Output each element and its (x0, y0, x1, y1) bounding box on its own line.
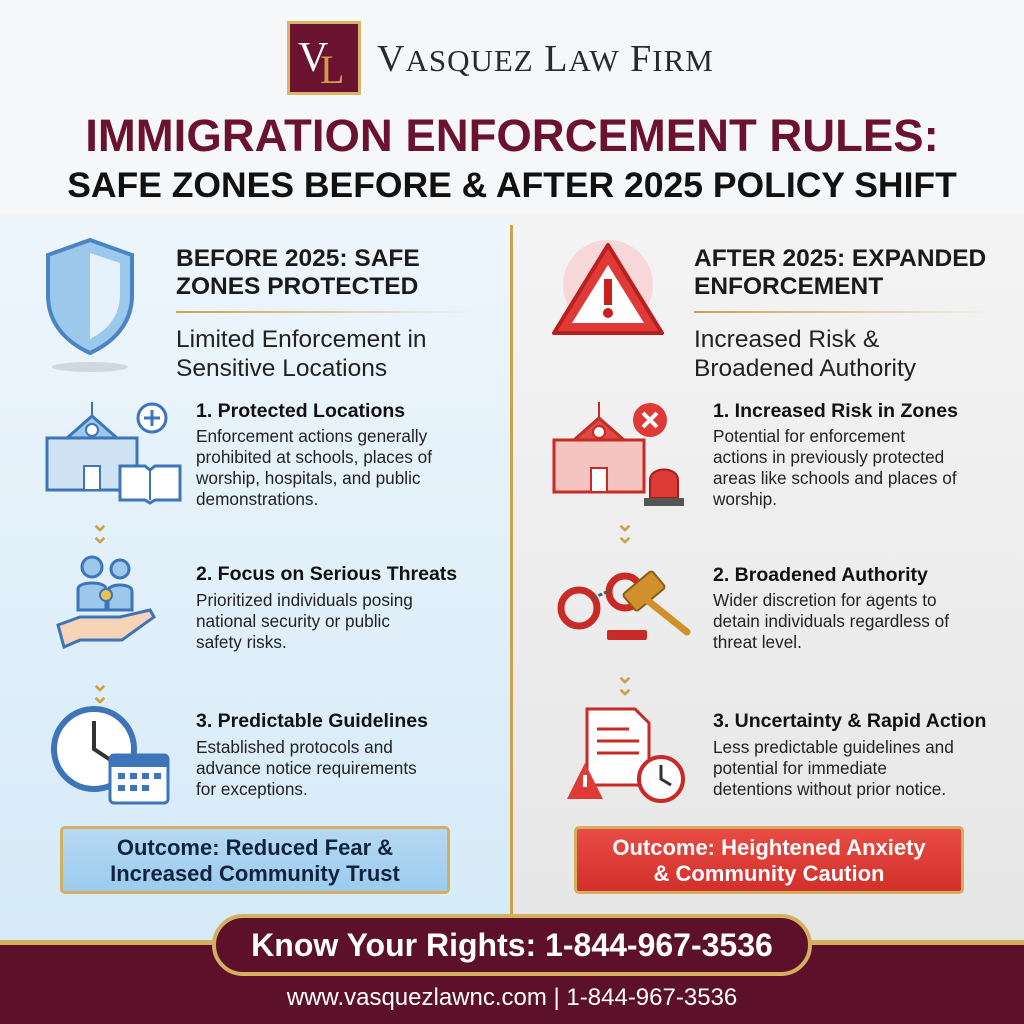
left item 3: for exceptions. (196, 779, 308, 799)
left item 2: Prioritized individuals posing (196, 590, 413, 610)
chevron left 1: ⌄ (91, 511, 109, 536)
chevron left 2: ⌄ (91, 671, 109, 696)
chevron right 2: ⌄ (616, 663, 634, 688)
right item 1: 1. Increased Risk in Zones (713, 400, 958, 422)
left item 1: prohibited at schools, places of (196, 447, 432, 467)
left item 1 (46, 400, 432, 509)
icon: school with alert (552, 402, 684, 506)
left item 3: advance notice requirements (196, 758, 417, 778)
title: IMMIGRATION ENFORCEMENT RULES: (85, 110, 939, 161)
right item 1: Potential for enforcement (713, 426, 905, 446)
title (67, 110, 957, 205)
right item 3: potential for immediate (713, 758, 887, 778)
right item 1: actions in previously protected (713, 447, 944, 467)
right header block: ENFORCEMENT (694, 273, 883, 300)
icon: handcuffs and gavel (558, 570, 690, 640)
left item 1: 1. Protected Locations (196, 400, 405, 422)
logo: V (298, 35, 328, 81)
footer band (0, 940, 1024, 1024)
right item 2: Wider discretion for agents to (713, 590, 937, 610)
right item 1: worship. (713, 489, 777, 509)
icon: school (46, 402, 182, 505)
divider (510, 225, 513, 915)
left item 2 (56, 556, 457, 652)
icon: shield (46, 238, 134, 372)
outcome left (60, 826, 450, 894)
chevron left 2 (91, 671, 109, 708)
left panel background (0, 215, 512, 945)
outcome left: Increased Community Trust (110, 861, 400, 886)
left header block (46, 238, 462, 382)
left item 3 (51, 706, 428, 804)
outcome right: & Community Caution (654, 861, 884, 886)
footer contact text: www.vasquezlawnc.com | 1-844-967-3536 (287, 984, 737, 1011)
right header block: Increased Risk & (694, 326, 879, 353)
left header block: Sensitive Locations (176, 355, 387, 382)
title: SAFE ZONES BEFORE & AFTER 2025 POLICY SHIFT (67, 165, 957, 205)
left item 2: national security or public (196, 611, 390, 631)
outcome left: Outcome: Reduced Fear & (117, 835, 393, 860)
right item 3: 3. Uncertainty & Rapid Action (713, 710, 986, 732)
icon: document, warning, clock (567, 708, 685, 803)
right header block: Broadened Authority (694, 355, 916, 382)
outcome right: Outcome: Heightened Anxiety (612, 835, 926, 860)
left item 3: Established protocols and (196, 737, 393, 757)
chevron left 2: ⌄ (91, 683, 109, 708)
left item 3: 3. Predictable Guidelines (196, 710, 428, 732)
left header block: Limited Enforcement in (176, 326, 427, 353)
right item 3 (567, 708, 986, 803)
right header block: AFTER 2025: EXPANDED (694, 245, 986, 272)
right item 2: detain individuals regardless of (713, 611, 949, 631)
icon: family in hand (56, 556, 156, 650)
right item 3: detentions without prior notice. (713, 779, 946, 799)
left item 2: safety risks. (196, 632, 287, 652)
icon: warning (552, 240, 664, 335)
right header block (552, 240, 986, 382)
chevron left 1 (91, 511, 109, 548)
chevron right 1 (616, 511, 634, 548)
left item 1: demonstrations. (196, 489, 318, 509)
right item 2: threat level. (713, 632, 802, 652)
left header block: BEFORE 2025: SAFE (176, 245, 420, 272)
right panel background (512, 215, 1024, 945)
right item 3: Less predictable guidelines and (713, 737, 954, 757)
icon: clock and calendar (51, 706, 170, 804)
right item 2: 2. Broadened Authority (713, 564, 928, 586)
call-to-action pill: Know Your Rights: 1-844-967-3536 (251, 927, 773, 963)
left item 2: 2. Focus on Serious Threats (196, 563, 457, 585)
chevron left 1: ⌄ (91, 523, 109, 548)
call-to-action pill (212, 914, 812, 976)
chevron right 1: ⌄ (616, 511, 634, 536)
right item 1 (552, 400, 958, 509)
chevron right 1: ⌄ (616, 523, 634, 548)
right item 1: areas like schools and places of (713, 468, 957, 488)
left item 1: Enforcement actions generally (196, 426, 427, 446)
left header block: ZONES PROTECTED (176, 273, 418, 300)
right item 2 (558, 564, 950, 652)
logo (287, 21, 714, 95)
logo: VASQUEZ LAW FIRM (377, 38, 714, 80)
chevron right 2: ⌄ (616, 675, 634, 700)
chevron right 2 (616, 663, 634, 700)
logo: L (320, 47, 344, 92)
left item 1: worship, hospitals, and public (196, 468, 421, 488)
outcome right (574, 826, 964, 894)
